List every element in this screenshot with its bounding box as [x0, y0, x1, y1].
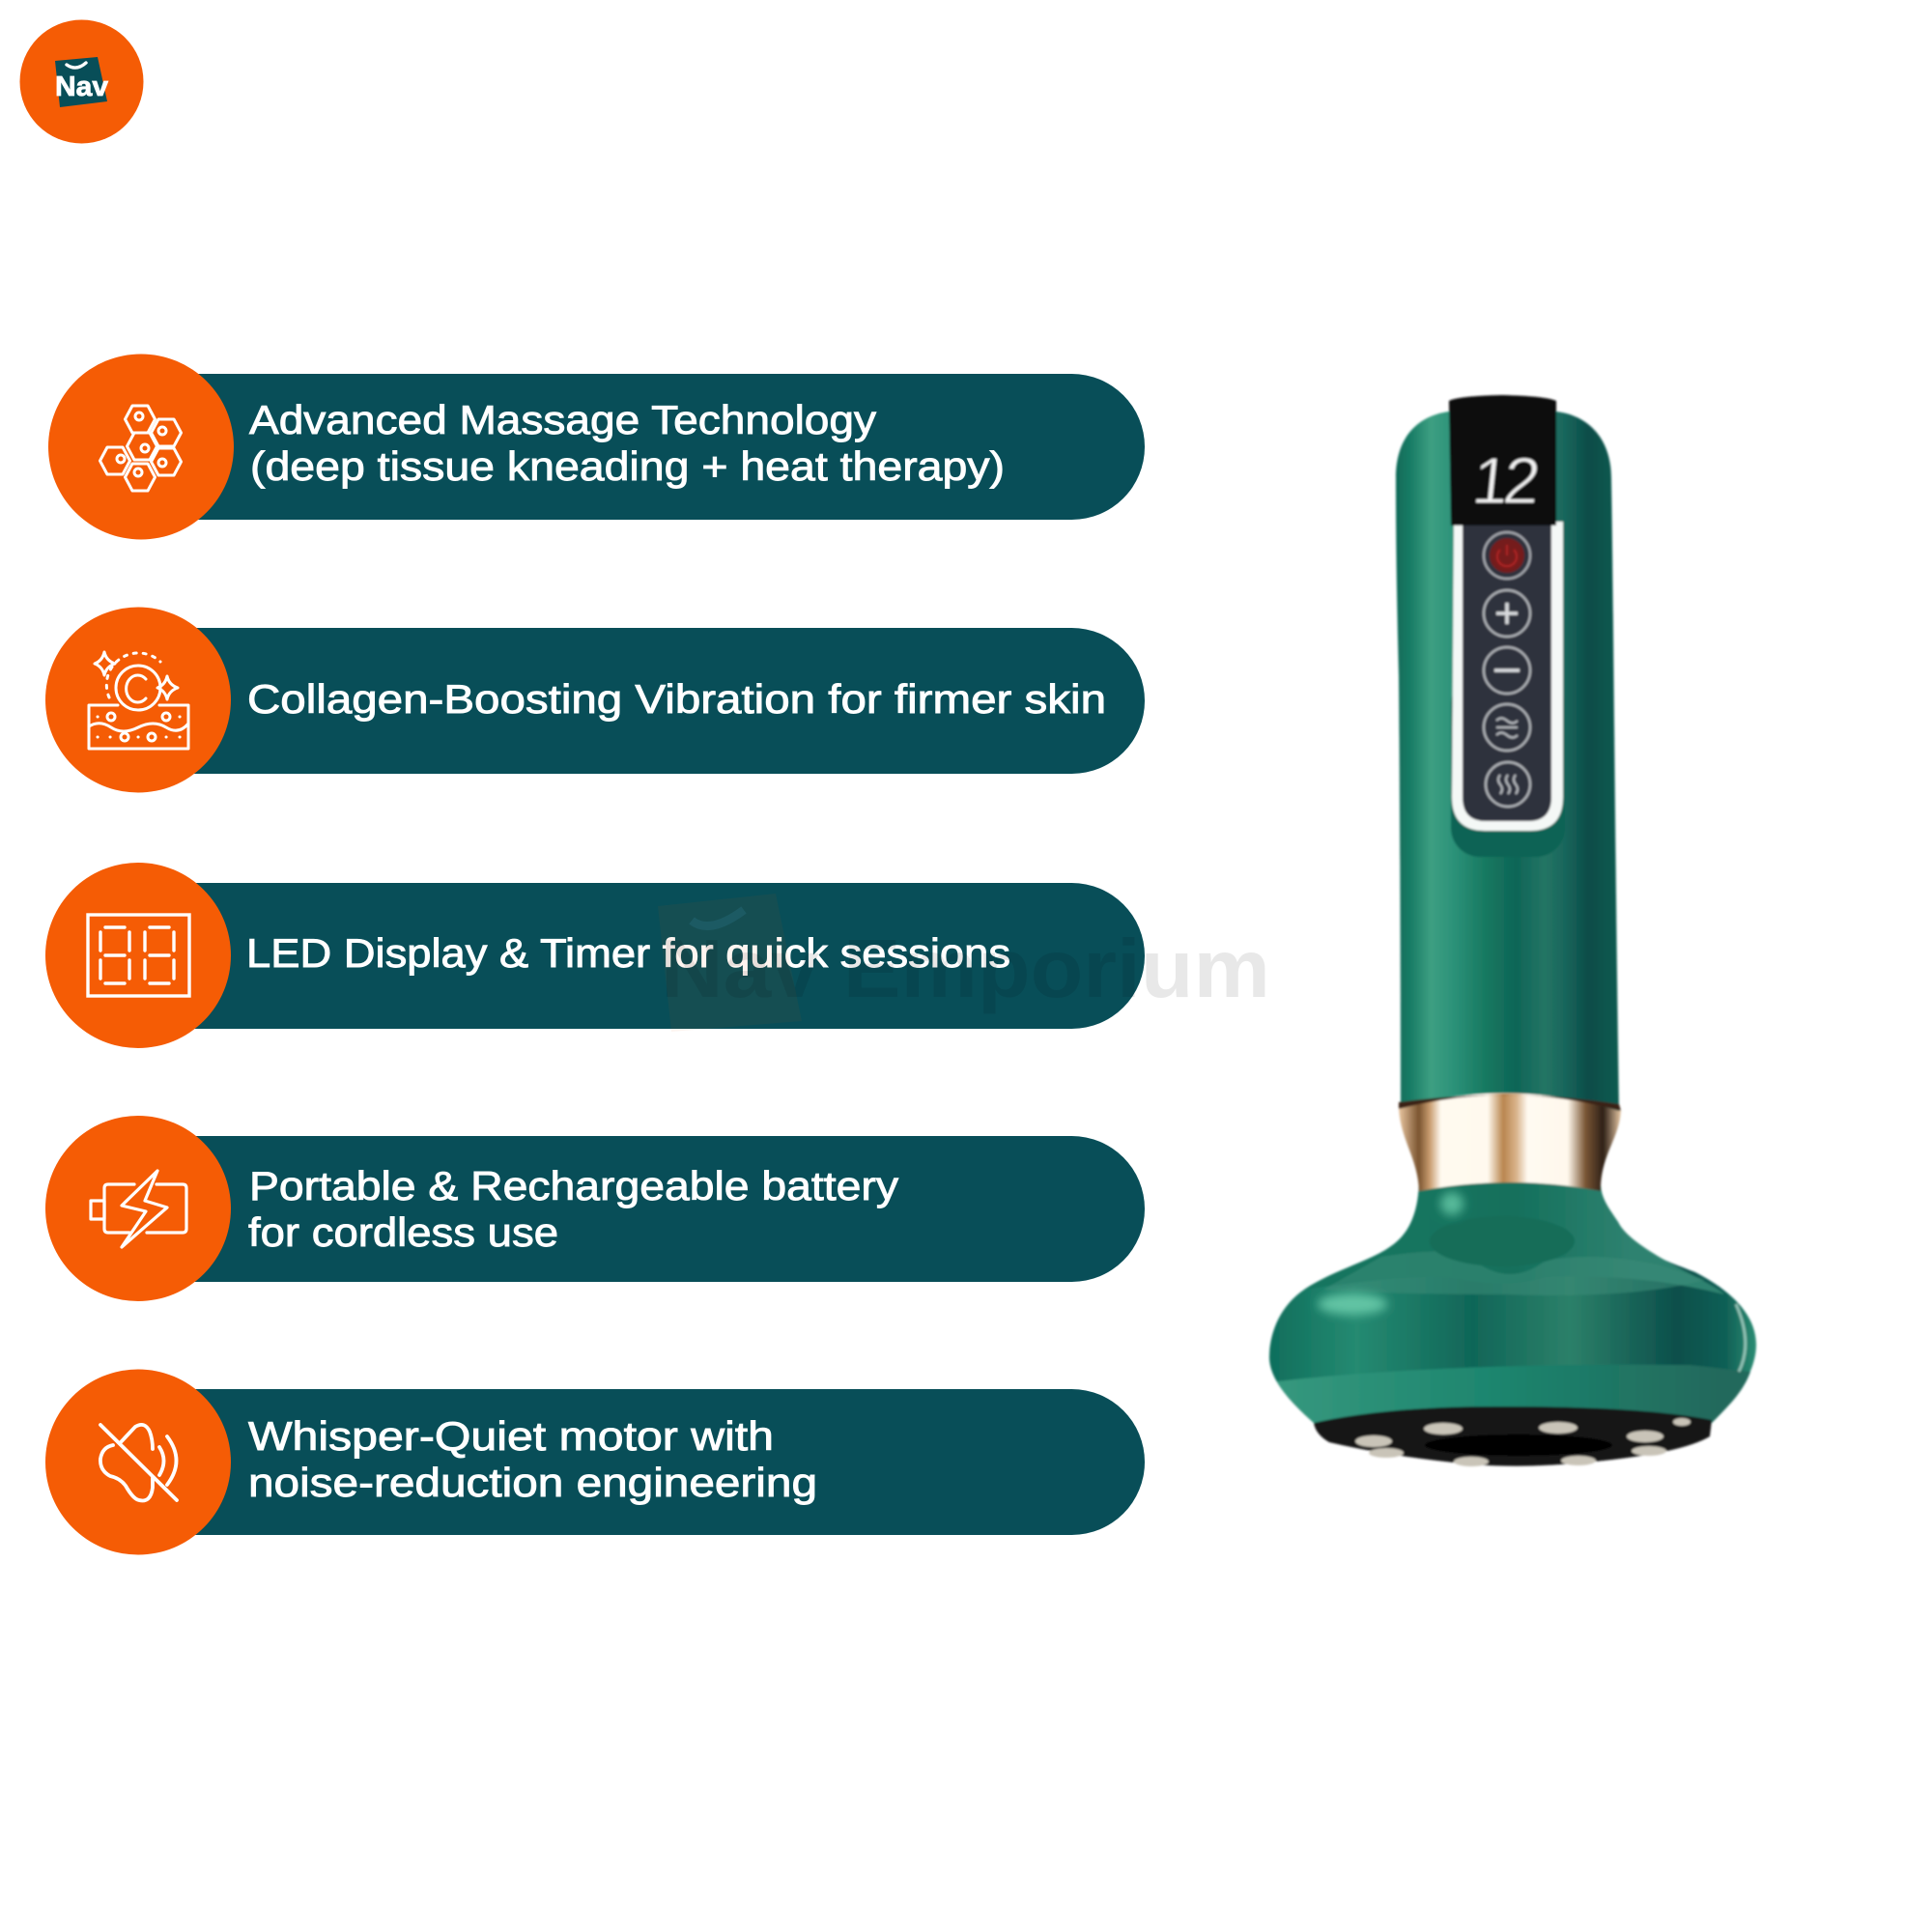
watermark [658, 894, 1270, 1032]
icon: honeycomb cells [100, 406, 182, 491]
text: LED display: LED Display & Timer for quick sessions [246, 930, 1010, 976]
icon: muted speaker [100, 1425, 177, 1500]
watermark: Nav Emporium [661, 923, 1270, 1015]
icon: collagen skin [89, 652, 188, 749]
text: quiet motor: Whisper-Quiet motor with [248, 1413, 774, 1459]
control panel [1463, 522, 1551, 821]
feature bar 5: quiet motor [45, 1370, 1145, 1555]
text: massage technology: Advanced Massage Technology [249, 397, 876, 442]
text: battery: Portable & Rechargeable battery [249, 1163, 898, 1208]
text: massage technology: (deep tissue kneading + heat therapy) [250, 443, 1005, 489]
text: battery: for cordless use [248, 1209, 558, 1255]
massager handle [1396, 412, 1619, 1111]
text: quiet motor [248, 1413, 817, 1505]
logo badge: Nav [55, 71, 108, 102]
control panel frame [1452, 522, 1563, 831]
massager plate [1314, 1406, 1712, 1466]
base shoulder tint [1304, 1179, 1724, 1294]
text: quiet motor: noise-reduction engineering [248, 1460, 817, 1505]
lower band [1277, 1365, 1750, 1423]
LED display number: 12 [1468, 444, 1544, 518]
product: massager [1269, 395, 1756, 1466]
massager base [1269, 1179, 1756, 1423]
LED display housing [1449, 395, 1556, 526]
power button [1484, 532, 1530, 579]
text: battery [248, 1163, 898, 1255]
logo badge [19, 19, 143, 143]
plus button [1484, 590, 1530, 637]
feature bar 4: battery [45, 1116, 1145, 1301]
text: collagen: Collagen-Boosting Vibration for firmer skin [247, 676, 1106, 722]
massager gold ring [1399, 1094, 1621, 1191]
heat button [1486, 762, 1530, 807]
feature bar 3: LED display [45, 863, 1145, 1048]
feature bar 2: collagen [45, 607, 1145, 792]
text: massage technology [249, 397, 1005, 489]
icon: LED digits [88, 915, 189, 996]
feature bar 1: massage technology [48, 354, 1145, 539]
panel recess [1451, 676, 1565, 857]
icon: battery with bolt [91, 1171, 186, 1247]
minus button [1484, 647, 1530, 694]
vibration button [1484, 704, 1530, 751]
